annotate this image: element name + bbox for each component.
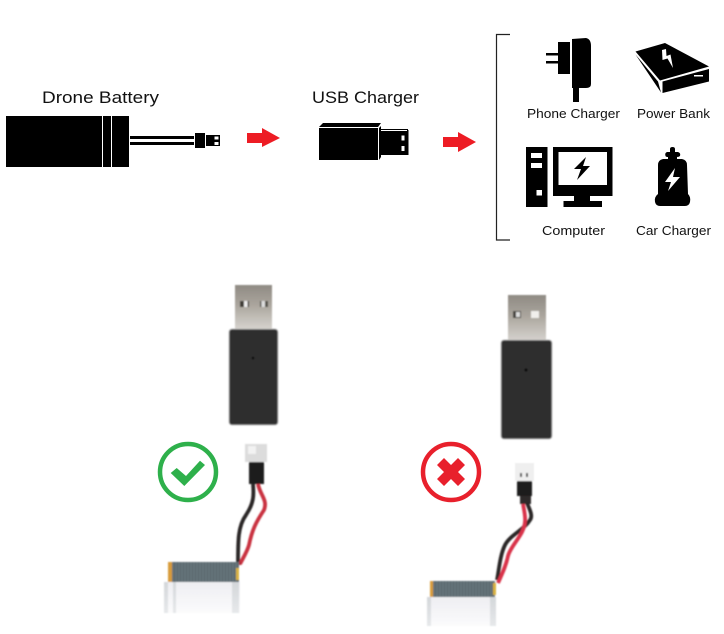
icon: phone charger [546,38,591,102]
photo: USB charger (correct) [229,285,278,425]
arrow: charger to power sources [443,132,476,152]
arrow: battery to charger [247,128,280,147]
icon: power bank [636,43,709,93]
photo: battery with correct connector [164,444,267,613]
icon: car charger [655,147,690,206]
icon: green check mark [160,444,216,500]
photo: battery with incorrect connector [427,463,534,626]
icon: drone battery with cable [6,116,220,167]
photo: USB charger (incorrect) [501,295,552,439]
icon: red cross mark [423,444,479,500]
icon: computer [526,147,612,207]
label: Car Charger: Car Charger [636,223,712,238]
label: Power Bank: Power Bank [637,106,711,121]
heading: USB Charger: USB Charger [312,89,420,107]
label: Phone Charger: Phone Charger [527,106,621,121]
bracket [496,34,510,240]
label: Computer: Computer [542,223,606,238]
icon: USB charger [319,123,408,160]
heading: Drone Battery: Drone Battery [42,89,160,107]
